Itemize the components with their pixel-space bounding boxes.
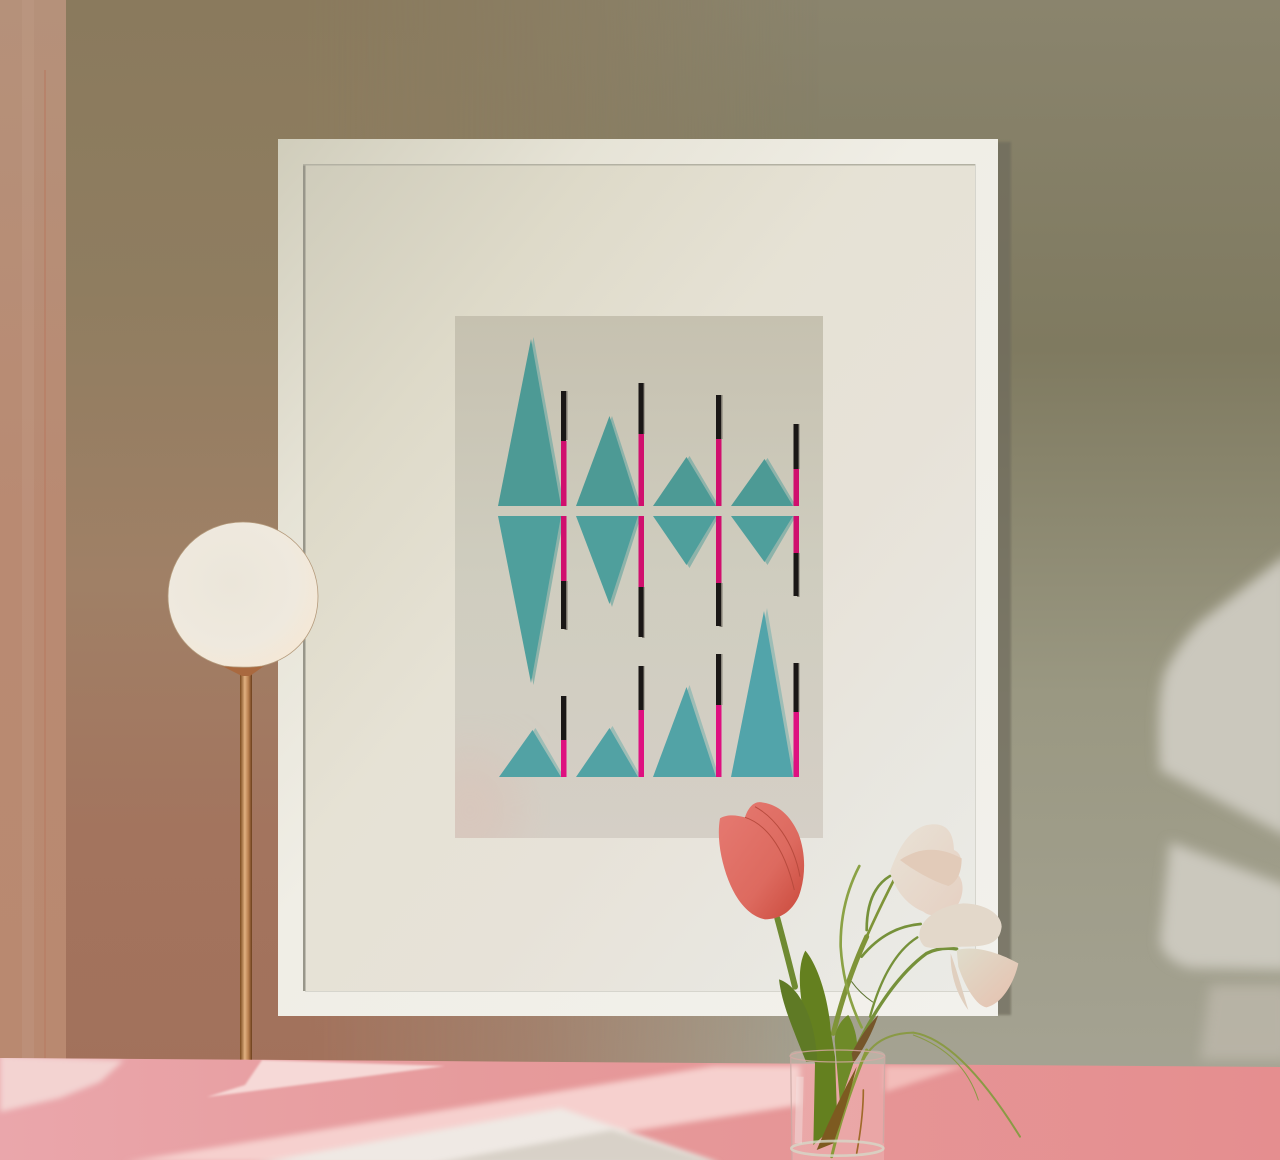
lamp globe [168,522,318,667]
wall light patch: upper window [1159,552,1280,838]
table white light block [250,1108,720,1160]
mat board [305,165,975,991]
wall light patch: lower window [1160,842,1280,970]
poster [455,316,823,838]
back glass of vase [790,1051,885,1160]
stems [777,866,1020,1157]
floor lamp [168,522,318,1063]
lamp pole [240,668,252,1063]
red tulip [719,802,804,919]
lamp cap [222,666,264,676]
wall light patch: faint bottom [1200,985,1280,1060]
leaves [800,951,837,1145]
pale tulip three [957,949,1018,1007]
pale tulip one [890,824,963,915]
left curtain strip [0,0,66,1062]
flowers in glass vase [719,802,1020,1160]
chart row 1: upward triangles [498,337,800,506]
table sunlight streaks [0,1055,124,1112]
chart row 3: bottom triangles [499,608,800,777]
pale tulip two [919,903,1002,948]
pink table [0,1050,1280,1160]
front glass of vase [790,1050,885,1160]
chart row 2: downward triangles [498,516,800,685]
frame drop shadow [996,142,1011,1015]
picture frame [278,139,998,1016]
